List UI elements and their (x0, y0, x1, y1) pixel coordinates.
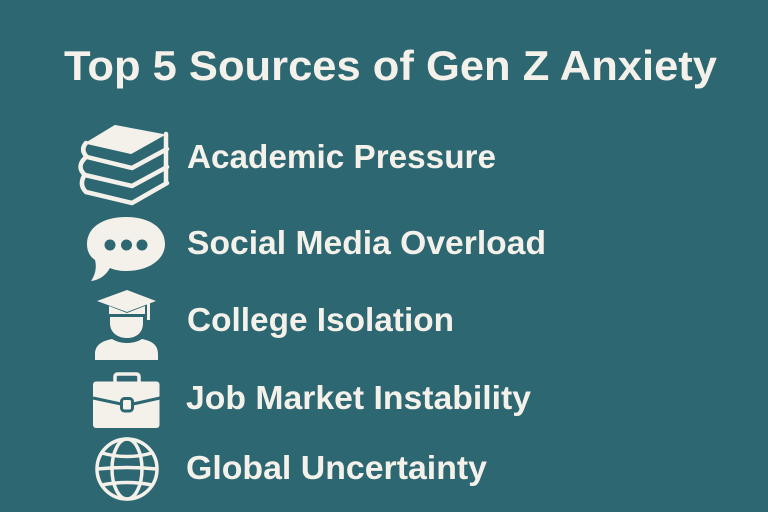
icon: speech bubble (87, 217, 165, 281)
label: Job Market Instability: Job Market Instability (186, 379, 532, 416)
icon: graduate (95, 290, 158, 360)
label: Social Media Overload: Social Media Overload (187, 224, 546, 261)
label: Global Uncertainty: Global Uncertainty (186, 449, 488, 486)
label: Academic Pressure: Academic Pressure (187, 138, 496, 175)
title: Top 5 Sources of Gen Z Anxiety (64, 42, 718, 89)
icon: globe (97, 439, 157, 499)
label: College Isolation: College Isolation (187, 301, 454, 338)
icon: briefcase (93, 374, 160, 428)
icon: stack of books (80, 126, 167, 203)
